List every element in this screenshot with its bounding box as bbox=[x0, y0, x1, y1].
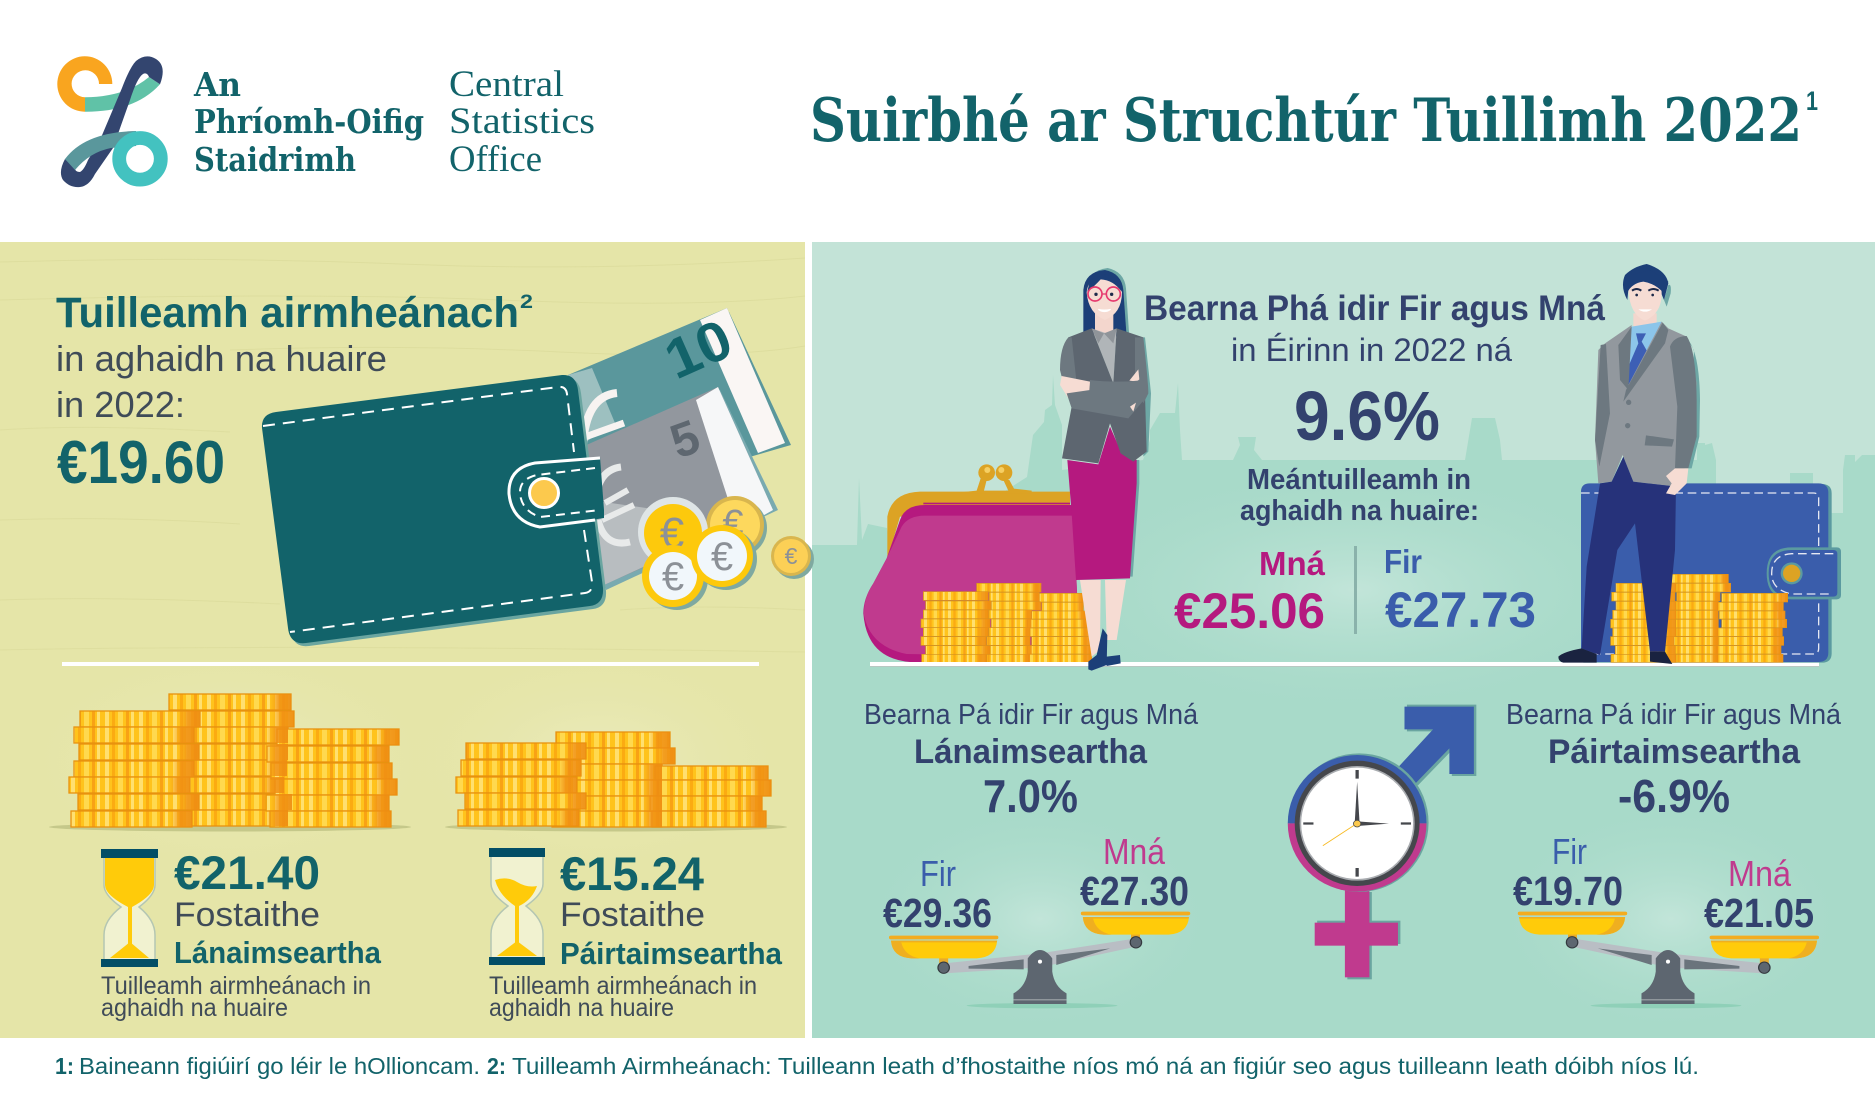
heading: median hourly earnings: Tuilleamh airmheánach bbox=[56, 289, 519, 337]
text: part-time gap: Páirtaimseartha bbox=[1548, 733, 1801, 771]
text: full-time earnings bbox=[101, 846, 382, 1022]
icon: balance scale full-time bbox=[889, 912, 1190, 1008]
coins: € bbox=[660, 509, 684, 558]
values: women and men mean earnings: €27.73 bbox=[1385, 582, 1536, 638]
heading: gender pay gap 9.6%: Meántuilleamh in bbox=[1247, 464, 1471, 496]
coins: € bbox=[722, 503, 744, 545]
footnotes: Baineann figiúirí go léir le hOllioncam. bbox=[79, 1053, 480, 1079]
text: full-time gap: 7.0% bbox=[983, 770, 1078, 822]
text: part-time earnings: Tuilleamh airmheánach in bbox=[489, 972, 757, 1000]
illustration: woman bbox=[1060, 268, 1151, 671]
logo wordmark: Irish: Staidrimh bbox=[194, 140, 356, 179]
text: part-time earnings: €15.24 bbox=[560, 847, 704, 900]
logo wordmark: Irish bbox=[193, 65, 424, 179]
icon: blue wallet with coins bbox=[1581, 483, 1841, 663]
icon: full hourglass bbox=[101, 849, 158, 967]
wallet bbox=[262, 375, 606, 646]
values: part-time scale: €19.70 bbox=[1513, 868, 1623, 914]
panel: gender pay gap bbox=[812, 242, 1875, 1038]
footnotes bbox=[55, 1053, 1699, 1079]
banknote 10: 10 bbox=[655, 307, 741, 391]
coins: € bbox=[662, 555, 684, 599]
values: part-time scale: Mná bbox=[1728, 853, 1792, 894]
icon: pink purse with coins bbox=[863, 464, 1092, 662]
panel: median earnings bbox=[0, 242, 805, 1038]
logo wordmark: English: Central bbox=[449, 64, 564, 105]
values: full-time scale: Mná bbox=[1103, 831, 1166, 872]
text: full-time earnings: aghaidh na huaire bbox=[101, 994, 288, 1022]
heading: median hourly earnings bbox=[56, 289, 533, 425]
logo wordmark: English: Office bbox=[449, 139, 542, 180]
logo wordmark: Irish: Phríomh-Oifig bbox=[194, 102, 424, 141]
text: part-time gap: Bearna Pá idir Fir agus Mná bbox=[1506, 699, 1842, 731]
text: full-time gap: Lánaimseartha bbox=[914, 733, 1148, 771]
text: part-time earnings: Páirtaimseartha bbox=[560, 936, 783, 971]
coin stack: part-time bbox=[445, 732, 787, 832]
coins bbox=[638, 496, 767, 610]
text: full-time earnings: Tuilleamh airmheánach in bbox=[101, 972, 371, 1000]
text: part-time gap: -6.9% bbox=[1618, 770, 1730, 822]
values: women and men mean earnings: Fir bbox=[1384, 543, 1422, 580]
text: part-time earnings: aghaidh na huaire bbox=[489, 994, 674, 1022]
values: women and men mean earnings: €25.06 bbox=[1174, 583, 1325, 639]
text: full-time gap: Bearna Pá idir Fir agus Mná bbox=[864, 699, 1199, 731]
values: part-time scale: Fir bbox=[1552, 831, 1587, 872]
footnotes: 2: bbox=[487, 1053, 506, 1079]
heading: median hourly earnings: 2 bbox=[520, 292, 533, 313]
text: full-time earnings: Fostaithe bbox=[174, 896, 320, 934]
text: part-time earnings: Fostaithe bbox=[560, 896, 705, 934]
logo mark bbox=[57, 56, 163, 187]
values: full-time scale: €29.36 bbox=[883, 890, 992, 936]
logo wordmark: English bbox=[449, 64, 595, 180]
wallet clasp bbox=[509, 457, 604, 528]
heading: gender pay gap 9.6%: aghaidh na huaire: bbox=[1240, 495, 1479, 527]
heading: gender pay gap 9.6% bbox=[1144, 289, 1606, 527]
icon: small coin over gutter: € bbox=[785, 543, 798, 569]
values: full-time scale bbox=[883, 831, 1189, 936]
values: part-time scale: €21.05 bbox=[1704, 890, 1814, 936]
value: median earnings: €19.60 bbox=[57, 429, 225, 496]
coins: € bbox=[711, 535, 733, 579]
heading: median hourly earnings: in 2022: bbox=[56, 384, 185, 425]
icon: clock in gender symbols bbox=[1288, 705, 1476, 979]
coin stack: full-time bbox=[49, 694, 411, 832]
footnotes: Tuilleamh Airmheánach: Tuilleann leath d’fhostaithe níos mó ná an figiúr seo agus tuilleann leath dóibh níos lú. bbox=[512, 1053, 1699, 1079]
footnotes: 1: bbox=[55, 1053, 74, 1079]
heading: median hourly earnings: in aghaidh na huaire bbox=[56, 338, 387, 379]
icon: part-used hourglass bbox=[489, 848, 545, 965]
values: full-time scale: €27.30 bbox=[1080, 868, 1189, 914]
logo wordmark: English: Statistics bbox=[449, 101, 595, 142]
values: part-time scale bbox=[1513, 831, 1814, 936]
text: part-time earnings bbox=[489, 847, 783, 1022]
values: women and men mean earnings: Mná bbox=[1259, 545, 1326, 582]
heading: gender pay gap 9.6%: in Éirinn in 2022 ná bbox=[1231, 332, 1512, 368]
text: full-time gap bbox=[864, 699, 1199, 822]
icon: small coin over gutter bbox=[771, 536, 814, 579]
heading: gender pay gap 9.6%: Bearna Phá idir Fir agus Mná bbox=[1144, 289, 1606, 328]
values: women and men mean earnings bbox=[1174, 543, 1536, 639]
icon: wallet with banknotes and coins bbox=[262, 307, 791, 646]
text: full-time earnings: €21.40 bbox=[174, 846, 320, 899]
heading: gender pay gap 9.6%: 9.6% bbox=[1294, 377, 1440, 455]
logo wordmark: Irish: An bbox=[193, 65, 241, 104]
icon: balance scale part-time bbox=[1518, 912, 1819, 1008]
banknote 10 bbox=[568, 307, 791, 500]
text: full-time earnings: Lánaimseartha bbox=[174, 935, 382, 970]
banknote 5 bbox=[575, 387, 778, 590]
values: full-time scale: Fir bbox=[920, 853, 956, 894]
logo bbox=[57, 56, 595, 187]
title: 1 bbox=[1806, 86, 1818, 116]
illustration: man bbox=[1558, 264, 1700, 664]
text: part-time gap bbox=[1506, 699, 1842, 822]
banknote 5: 5 bbox=[664, 410, 707, 469]
